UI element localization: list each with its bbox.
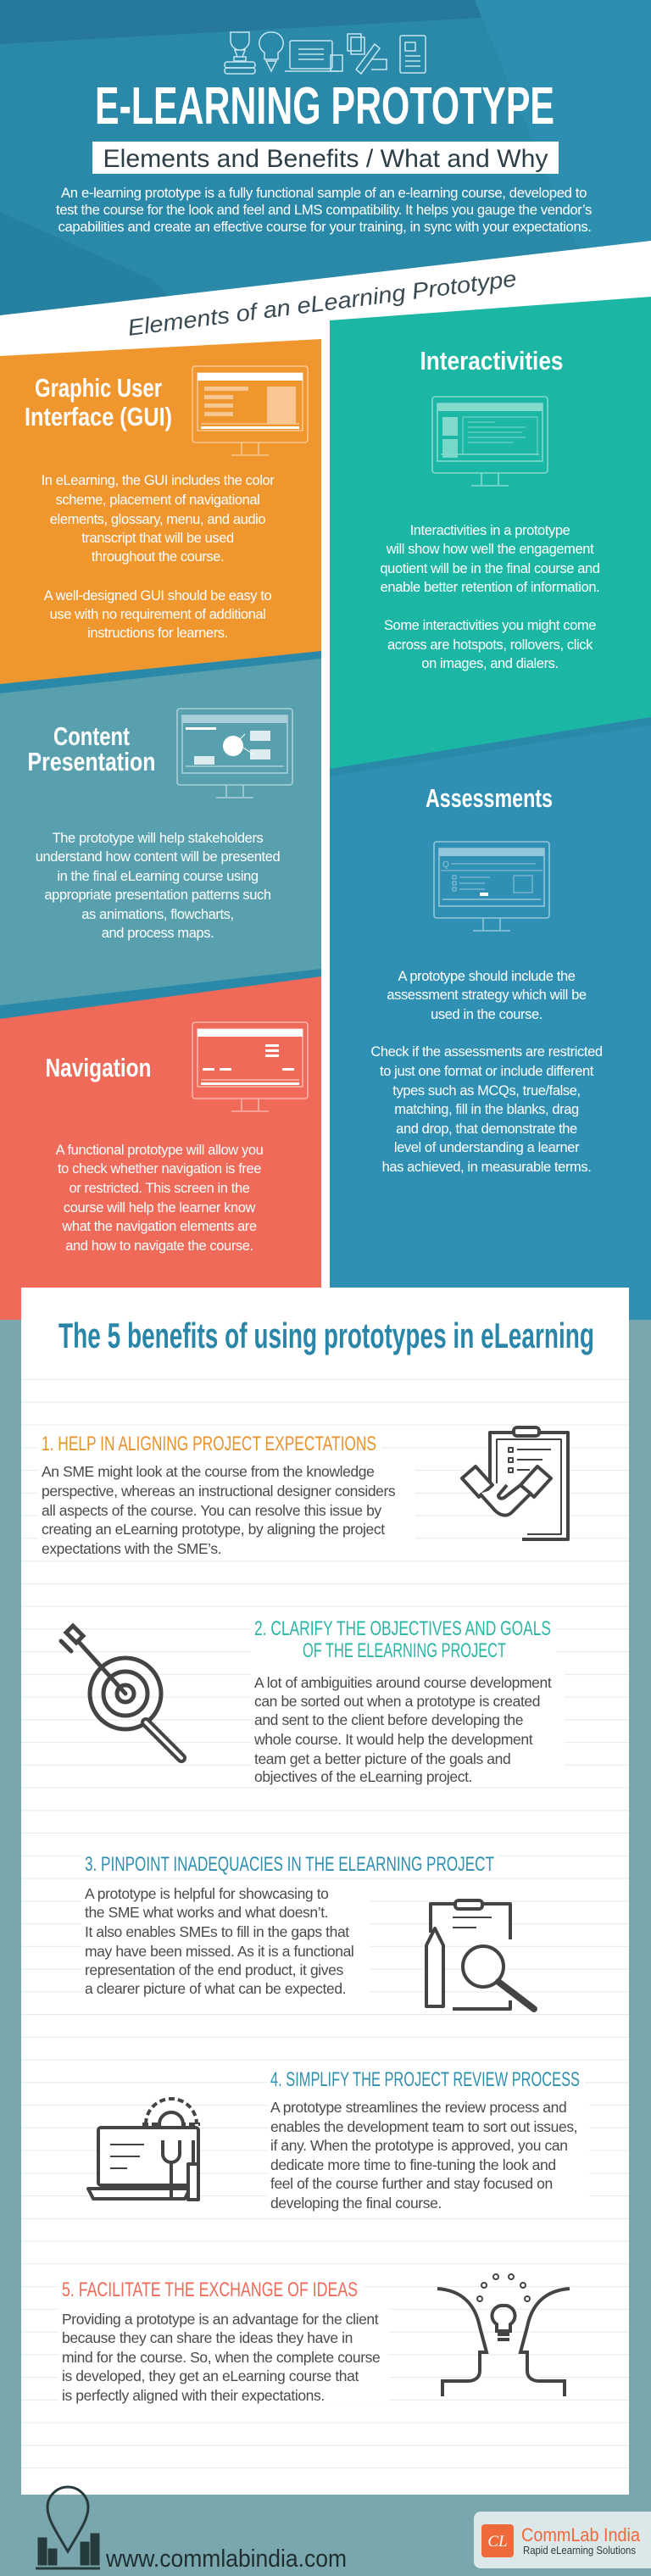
panel: Interactivities (teal) — [330, 297, 651, 769]
intro paragraph — [56, 186, 592, 235]
panel: Assessments (blue) — [330, 725, 651, 1322]
panel: Content Presentation: and process maps. — [102, 926, 214, 941]
column divider — [321, 331, 330, 1288]
panel: Interactivities (teal): quotient will be in the final course and — [380, 561, 600, 576]
icon: handshake clipboard — [462, 1427, 568, 1539]
benefit 4: developing the final course. — [270, 2195, 442, 2212]
panel: GUI (orange): elements, glossary, menu, and audio — [50, 512, 265, 527]
icon: laptop with gear and tools — [88, 2099, 200, 2200]
icon: assessment monitor — [434, 842, 549, 931]
benefit 5 — [58, 2274, 570, 2404]
panel: benefits white sheet — [21, 1288, 629, 2495]
panel: Content Presentation — [0, 659, 321, 1005]
header background — [0, 0, 651, 390]
benefit 3 — [81, 1851, 534, 2009]
intro paragraph: capabilities and create an effective course for your training, in sync with your expectations. — [58, 220, 592, 235]
footer: CommLab India logo box: Rapid eLearning Solutions — [523, 2544, 636, 2557]
benefit 3: may have been missed. As it is a functional — [85, 1943, 353, 1960]
intro paragraph: An e-learning prototype is a fully functional sample of an e-learning course, developed to — [61, 186, 587, 201]
icon: pie chart monitor — [177, 709, 292, 798]
icon row: trophy, bulb, laptop, documents, pen — [225, 32, 426, 74]
benefit 2: A lot of ambiguities around course development — [254, 1674, 552, 1691]
panel: Navigation: what the navigation elements are — [61, 1219, 257, 1234]
panel: GUI (orange): Interface (GUI) — [25, 402, 172, 431]
section band: Elements of an eLearning Prototype — [0, 241, 651, 390]
panel: Content Presentation: The prototype will help stakeholders — [53, 831, 264, 846]
benefit 4: A prototype streamlines the review process and — [270, 2099, 566, 2116]
benefit 2 — [61, 1609, 565, 1785]
panel: GUI (orange): A well-designed GUI should be easy to — [44, 588, 272, 604]
panel: GUI (orange): In eLearning, the GUI includes the color — [42, 473, 275, 488]
benefit 1 — [38, 1427, 568, 1557]
benefit 2: whole course. It would help the development — [253, 1731, 533, 1748]
panel: Assessments (blue): and drop, that demonstrate the — [396, 1121, 577, 1137]
benefit 5: because they can share the ideas they have in — [62, 2329, 353, 2346]
benefit 3: representation of the end product, it gives — [85, 1961, 343, 1978]
panel: Interactivities (teal): will show how well the engagement — [386, 542, 594, 557]
benefit 2: can be sorted out when a prototype is created — [254, 1693, 540, 1710]
panel: Assessments (blue): assessment strategy which will be — [387, 988, 587, 1003]
panel: Navigation: and how to navigate the course. — [65, 1238, 253, 1254]
icon: GUI monitor — [192, 366, 308, 455]
panel: Interactivities (teal): on images, and dialers. — [421, 656, 559, 671]
benefit 5: 5. FACILITATE THE EXCHANGE OF IDEAS — [62, 2278, 358, 2301]
panel: Assessments (blue): to just one format or include different — [380, 1064, 594, 1079]
benefits background — [0, 1320, 651, 2576]
subtitle box: Elements and Benefits / What and Why — [103, 145, 548, 173]
panel: Interactivities (teal): enable better retention of information. — [381, 580, 599, 595]
footer: CommLab India logo box: CL — [487, 2533, 508, 2551]
benefit 1: An SME might look at the course from the knowledge — [42, 1463, 374, 1480]
benefit 3: a clearer picture of what can be expected. — [85, 1980, 346, 1997]
panel: Assessments (blue): types such as MCQs, true/false, — [392, 1083, 581, 1099]
benefit 2: objectives of the eLearning project. — [254, 1768, 472, 1785]
benefit 1: 1. HELP IN ALIGNING PROJECT EXPECTATIONS — [42, 1433, 376, 1455]
panel: Assessments (blue): has achieved, in measurable terms. — [382, 1160, 591, 1175]
benefit 4: feel of the course further and stay focused on — [270, 2175, 553, 2192]
benefit 4: if any. When the prototype is approved, you can — [270, 2137, 568, 2154]
section band: Elements of an eLearning Prototype: Elements of an eLearning Prototype — [126, 265, 518, 341]
benefit 1: all aspects of the course. You can resolve this issue by — [42, 1502, 381, 1519]
icon: target with arrow — [61, 1626, 181, 1758]
panel: Navigation: Navigation — [46, 1053, 151, 1082]
panel: Content Presentation: Presentation — [27, 747, 156, 776]
intro paragraph: test the course for the look and feel and LMS compatibility. It helps you gauge the vendor’s — [56, 203, 592, 218]
panel: GUI (orange): use with no requirement of additional — [50, 607, 265, 622]
benefit 3: the SME what works and what doesn’t. — [85, 1904, 328, 1921]
panel: Content Presentation: in the final eLearning course using — [57, 869, 259, 884]
panel: Interactivities (teal): Interactivities — [420, 346, 563, 376]
benefit 1: creating an eLearning prototype, by aligning the project — [42, 1521, 385, 1538]
footer: website url: www.commlabindia.com — [105, 2545, 347, 2573]
panel: Assessments (blue): Check if the assessments are restricted — [370, 1044, 603, 1060]
footer: CommLab India logo box: CommLab India — [521, 2524, 641, 2545]
panel: GUI (orange): scheme, placement of navigational — [56, 492, 259, 508]
panel: Assessments (blue): used in the course. — [431, 1007, 542, 1022]
icon: assessment monitor: Q — [442, 860, 449, 870]
panel: Interactivities (teal): Some interactivities you might come — [384, 618, 596, 633]
benefit 2: team get a better picture of the goals and — [254, 1750, 510, 1767]
icon: clipboard, pencil, magnifier — [426, 1900, 534, 2009]
panel: Content Presentation: appropriate presentation patterns such — [44, 887, 271, 903]
panel: Assessments (blue): level of understanding a learner — [394, 1140, 580, 1155]
benefit 3: A prototype is helpful for showcasing to — [85, 1885, 329, 1902]
panel: Navigation: course will help the learner know — [64, 1200, 256, 1216]
panel: Navigation: A functional prototype will allow you — [56, 1143, 264, 1158]
footer: location pin logo — [36, 2487, 100, 2568]
benefit 5: is developed, they get an eLearning course that — [62, 2367, 359, 2384]
benefit 2: and sent to the client before developing the — [254, 1711, 523, 1728]
panel: Navigation — [0, 976, 321, 1322]
benefit 2: OF THE ELEARNING PROJECT — [303, 1639, 506, 1662]
panel: Content Presentation: understand how content will be presented — [36, 849, 280, 865]
panel: Interactivities (teal): across are hotspots, rollovers, click — [387, 637, 593, 653]
panel: Assessments (blue): A prototype should include the — [398, 969, 576, 984]
footer: CommLab India logo box — [474, 2512, 651, 2568]
benefit 4: enables the development team to sort out issues, — [270, 2118, 577, 2135]
icon: navigation monitor — [192, 1022, 308, 1111]
panel: GUI (orange): Graphic User — [35, 373, 162, 403]
benefit 3: 3. PINPOINT INADEQUACIES IN THE ELEARNING PROJECT — [85, 1853, 494, 1876]
benefit 1: expectations with the SME’s. — [42, 1540, 221, 1557]
panel: GUI (orange): transcript that will be used — [81, 531, 234, 546]
panel: Content Presentation: Content — [53, 721, 130, 751]
benefit 5: is perfectly aligned with their expectations. — [62, 2387, 325, 2404]
icon: two heads with bulb — [437, 2274, 570, 2396]
panel: Navigation: or restricted. This screen in the — [69, 1181, 250, 1196]
benefit 4: dedicate more time to fine-tuning the look and — [270, 2156, 556, 2173]
panel: Content Presentation: as animations, flowcharts, — [81, 907, 234, 922]
benefit 5: Providing a prototype is an advantage for the client — [62, 2311, 379, 2328]
panel: GUI (orange): instructions for learners. — [87, 626, 228, 641]
panel: Assessments (blue): matching, fill in the blanks, drag — [394, 1102, 579, 1117]
panel: Interactivities (teal): Interactivities in a prototype — [410, 523, 570, 538]
benefit 4 — [88, 2067, 589, 2212]
benefit 5: mind for the course. So, when the complete course — [62, 2349, 380, 2366]
panel: Navigation: to check whether navigation is free — [58, 1161, 261, 1177]
benefit 1: perspective, whereas an instructional designer considers — [42, 1483, 396, 1499]
icon: interactivity monitor — [432, 397, 548, 486]
benefit 3: It also enables SMEs to fill in the gaps that — [85, 1923, 349, 1940]
panel: Assessments (blue): Assessments — [426, 783, 553, 813]
panel: GUI (orange) — [0, 339, 321, 684]
panel: GUI (orange): throughout the course. — [92, 549, 224, 565]
